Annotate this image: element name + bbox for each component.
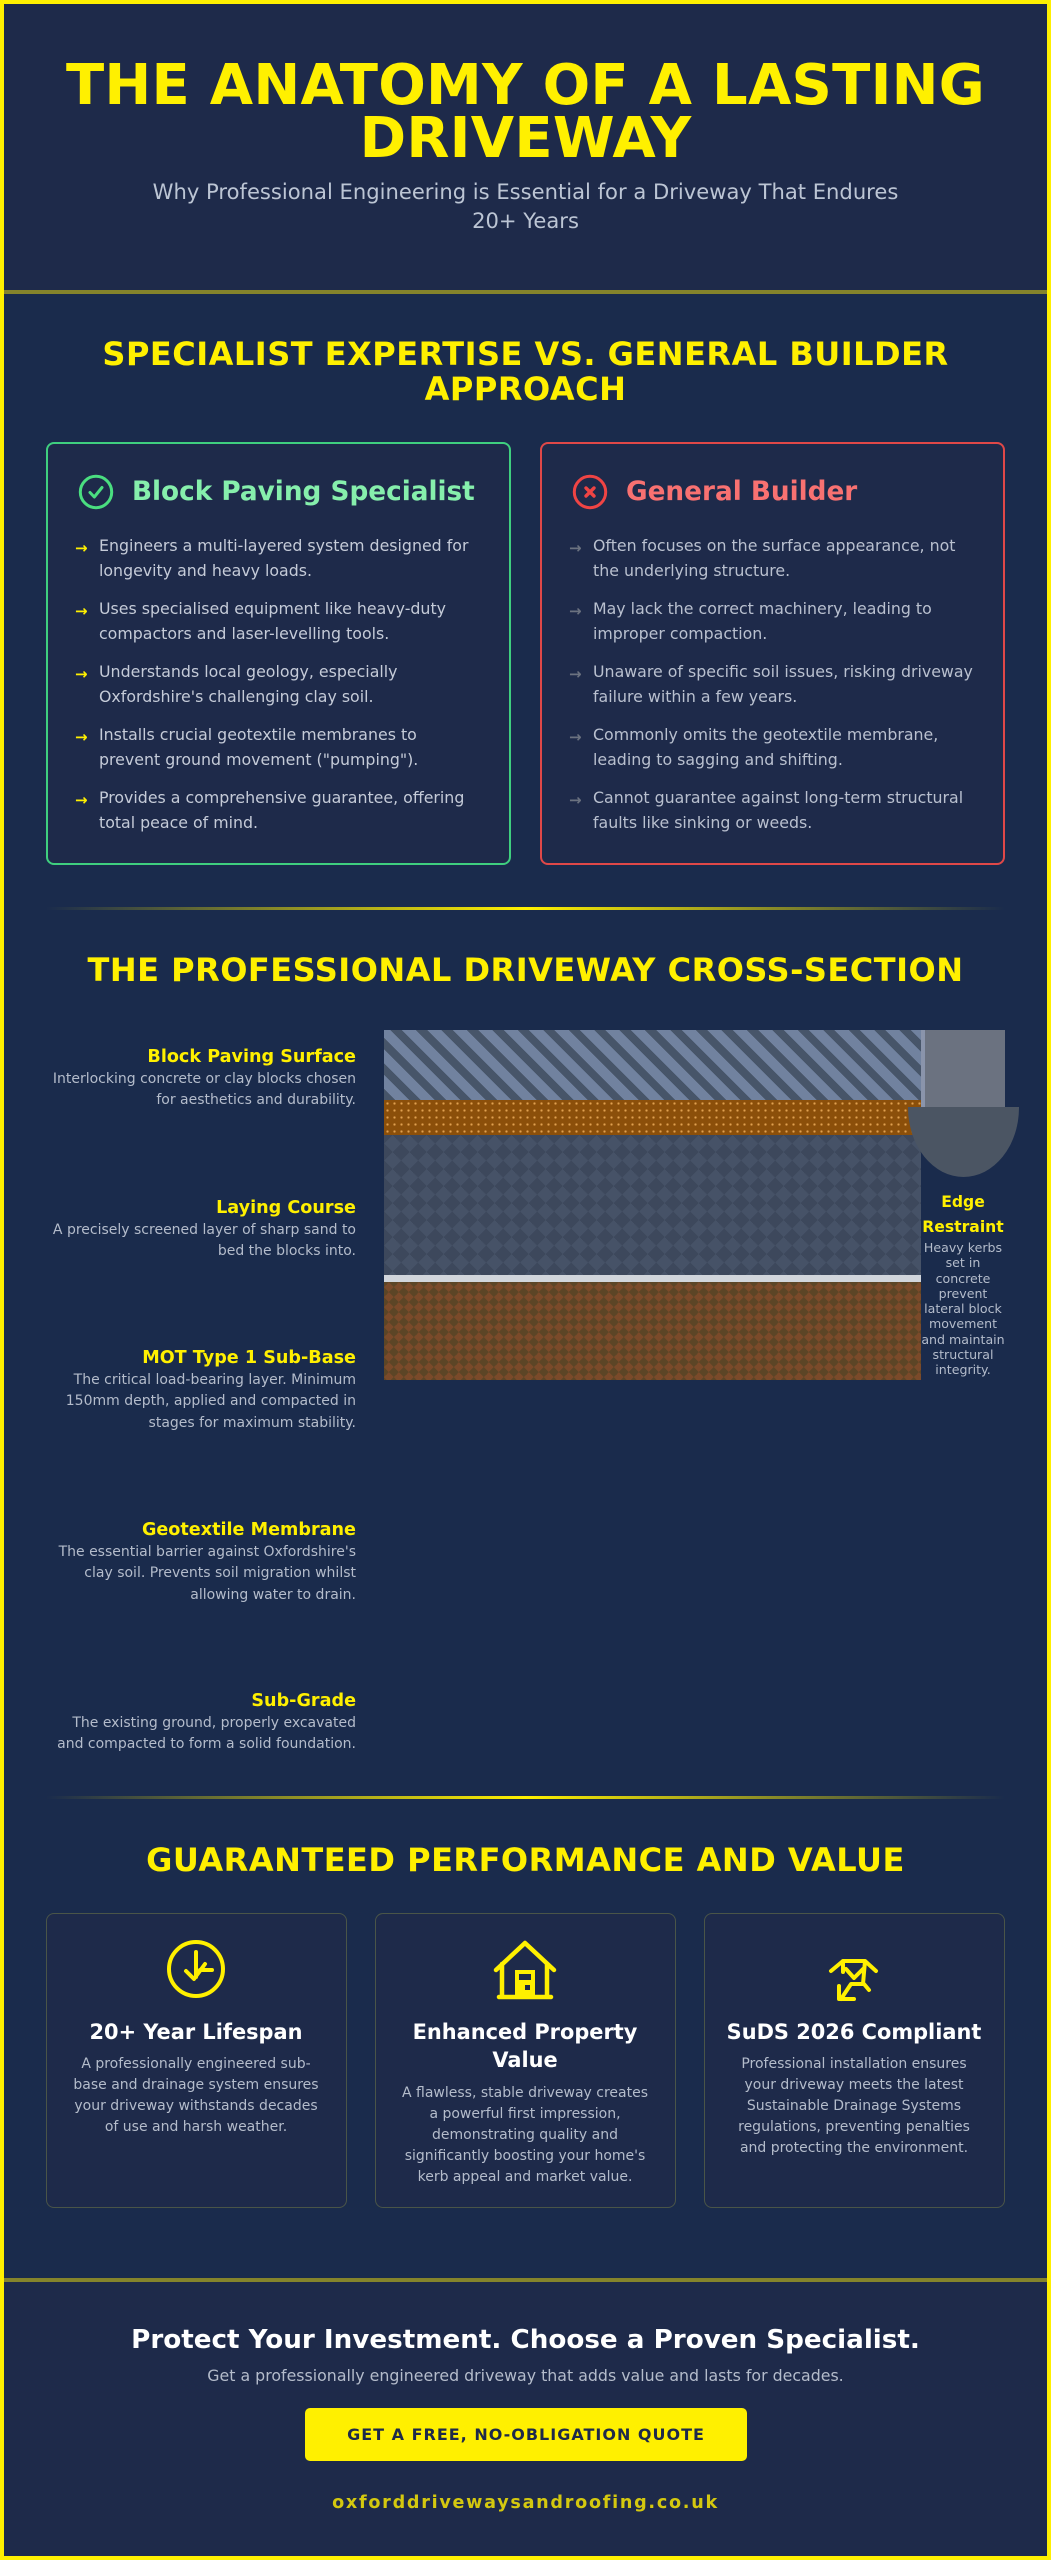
text 5: total peace of mind. [99,813,258,832]
button: GET A FREE, NO-OBLIGATION QUOTE [347,2425,705,2444]
item 2: → [569,602,582,620]
item 3: → [75,665,88,683]
label: MOT sub-base: 150mm depth, applied and compacted in [66,1393,356,1409]
text 4: Installs crucial geotextile membranes to [99,725,417,744]
label: sub-grade: and compacted to form a solid foundation. [57,1736,356,1752]
SuDS text: Professional installation ensures [741,2056,967,2072]
label: geotextile membrane: clay soil. Prevents soil migration whilst [84,1565,356,1581]
SuDS text: Sustainable Drainage Systems [747,2098,961,2114]
edge restraint title: Restraint [922,1218,1004,1236]
label: sub-grade: The existing ground, properly excavated [72,1715,356,1731]
label: sub-grade: Sub-Grade [251,1691,356,1711]
heading: specialist expertise: SPECIALIST EXPERTISE VS. GENERAL BUILDER [102,334,949,372]
text 1 [99,536,468,580]
label: MOT sub-base [66,1348,356,1431]
text 4 [593,725,938,769]
text 2 [593,599,932,643]
text 2: May lack the correct machinery, leading to [593,599,932,618]
text 1: Often focuses on the surface appearance, not [593,536,955,555]
subtitle: Why Professional Engineering is Essential for a Driveway That Endures [153,179,898,204]
icon: cross circle [572,474,608,510]
text 2 [99,599,446,643]
title [66,53,985,171]
text 3 [99,662,398,706]
label: MOT sub-base: MOT Type 1 Sub-Base [142,1348,356,1368]
text 5 [99,788,464,832]
edge restraint text [921,1240,1005,1377]
label: geotextile membrane: allowing water to drain. [190,1587,356,1603]
panel: property value [375,1913,676,2208]
property value text: significantly boosting your home's [405,2148,645,2164]
text 4 [99,725,418,769]
icon: check circle [78,474,114,510]
edge restraint title [922,1193,1004,1236]
heading: cross-section: THE PROFESSIONAL DRIVEWAY CROSS-SECTION [88,951,963,989]
layer: block paving [384,1030,921,1100]
SuDS text: your driveway meets the latest [744,2077,964,2093]
label: block paving surface [53,1047,356,1108]
footer [0,2278,1051,2560]
label: laying course: A precisely screened layer of sharp sand to [53,1222,356,1238]
label: geotextile membrane: Geotextile Membrane [142,1520,356,1540]
item 4: → [569,728,582,746]
lifespan text: 20+ Year Lifespan [90,2020,302,2044]
heading: general builder: General Builder [626,477,857,507]
SuDS text: regulations, preventing penalties [738,2119,970,2135]
icon: house [494,1940,556,2000]
property value text: a powerful first impression, [429,2106,621,2122]
edge restraint text: and maintain [921,1332,1005,1347]
icon: clock arrow [167,1940,225,1998]
text 4: prevent ground movement ("pumping"). [99,750,418,769]
label: block paving surface: Block Paving Surface [147,1047,356,1067]
lifespan text [73,2020,319,2135]
label: block paving surface: Interlocking concrete or clay blocks chosen [53,1071,356,1087]
text 1: longevity and heavy loads. [99,561,312,580]
text 4: leading to sagging and shifting. [593,750,843,769]
edge restraint text: set in [946,1255,980,1270]
SuDS text [727,2020,981,2156]
label: sub-grade [57,1691,356,1752]
text 5: faults like sinking or weeds. [593,813,812,832]
label: MOT sub-base: stages for maximum stability. [149,1415,356,1431]
item 5: → [75,791,88,809]
title: THE ANATOMY OF A LASTING [66,53,985,118]
panel: general builder [540,442,1005,865]
item 2: → [75,602,88,620]
label: geotextile membrane: The essential barrier against Oxfordshire's [59,1544,356,1560]
edge restraint text: movement [929,1316,997,1331]
concrete haunch [908,1107,1019,1177]
text 2: compactors and laser-levelling tools. [99,624,389,643]
text 3: failure within a few years. [593,687,797,706]
property value text: Enhanced Property [413,2020,637,2044]
text 4: Commonly omits the geotextile membrane, [593,725,938,744]
label: laying course [53,1198,356,1259]
edge restraint text: prevent [939,1286,987,1301]
kerb [921,1030,1005,1107]
item 1: → [569,539,582,557]
icon: drainage arrows [828,1959,878,2002]
layer: geotextile [384,1275,921,1282]
layer: sub-base [384,1135,921,1275]
text 1 [593,536,956,580]
edge restraint text: structural [933,1347,993,1362]
label: edge restraint [921,1193,1005,1377]
property value text: demonstrating quality and [432,2127,618,2143]
edge restraint text: Heavy kerbs [924,1240,1002,1255]
lifespan text: of use and harsh weather. [105,2119,287,2135]
footer heading: Protect Your Investment. Choose a Proven Specialist. [131,2325,920,2355]
button [305,2408,747,2461]
panel: SuDS [704,1913,1005,2208]
heading: specialist expertise: APPROACH [425,370,626,408]
text 5: Provides a comprehensive guarantee, offering [99,788,464,807]
text 3: Understands local geology, especially [99,662,398,681]
edge restraint text: integrity. [935,1362,991,1377]
item 1: → [75,539,88,557]
edge restraint text: lateral block [924,1301,1002,1316]
item 4: → [75,728,88,746]
item 3: → [569,665,582,683]
property value text: kerb appeal and market value. [418,2169,632,2185]
text 2: improper compaction. [593,624,767,643]
edge restraint text: concrete [936,1271,990,1286]
edge restraint title: Edge [941,1193,985,1211]
property value text: A flawless, stable driveway creates [402,2085,648,2101]
heading: guaranteed performance: GUARANTEED PERFORMANCE AND VALUE [146,1841,905,1879]
lifespan text: base and drainage system ensures [73,2077,319,2093]
title: DRIVEWAY [360,106,691,171]
panel: lifespan [46,1913,347,2208]
subtitle: 20+ Years [472,208,579,232]
heading: block paving specialist: Block Paving Specialist [132,477,475,507]
label: laying course: Laying Course [216,1198,356,1218]
layer: sub-grade [384,1282,921,1380]
footer subheading: Get a professionally engineered driveway that adds value and lasts for decades. [207,2366,844,2385]
header [0,0,1051,294]
subtitle [153,179,898,232]
label: geotextile membrane [58,1520,356,1603]
lifespan text: your driveway withstands decades [74,2098,318,2114]
website url: oxforddrivewaysandroofing.co.uk [332,2493,719,2513]
text 3: Oxfordshire's challenging clay soil. [99,687,374,706]
layer: laying course [384,1100,921,1135]
diagram: driveway cross-section [384,1030,1019,1380]
SuDS text: and protecting the environment. [740,2140,968,2156]
text 3 [593,662,973,706]
property value text: Value [492,2048,558,2072]
text 1: the underlying structure. [593,561,790,580]
lifespan text: A professionally engineered sub- [81,2056,311,2072]
text 3: Unaware of specific soil issues, risking driveway [593,662,973,681]
label: laying course: bed the blocks into. [218,1243,356,1259]
heading: specialist expertise [102,334,949,408]
label: MOT sub-base: The critical load-bearing layer. Minimum [74,1372,356,1388]
label: block paving surface: for aesthetics and durability. [156,1092,356,1108]
text 5: Cannot guarantee against long-term structural [593,788,963,807]
panel: block paving specialist [46,442,511,865]
SuDS text: SuDS 2026 Compliant [727,2020,981,2044]
property value text [402,2020,648,2185]
item 5: → [569,791,582,809]
text 1: Engineers a multi-layered system designed for [99,536,468,555]
text 5 [593,788,963,832]
text 2: Uses specialised equipment like heavy-duty [99,599,446,618]
